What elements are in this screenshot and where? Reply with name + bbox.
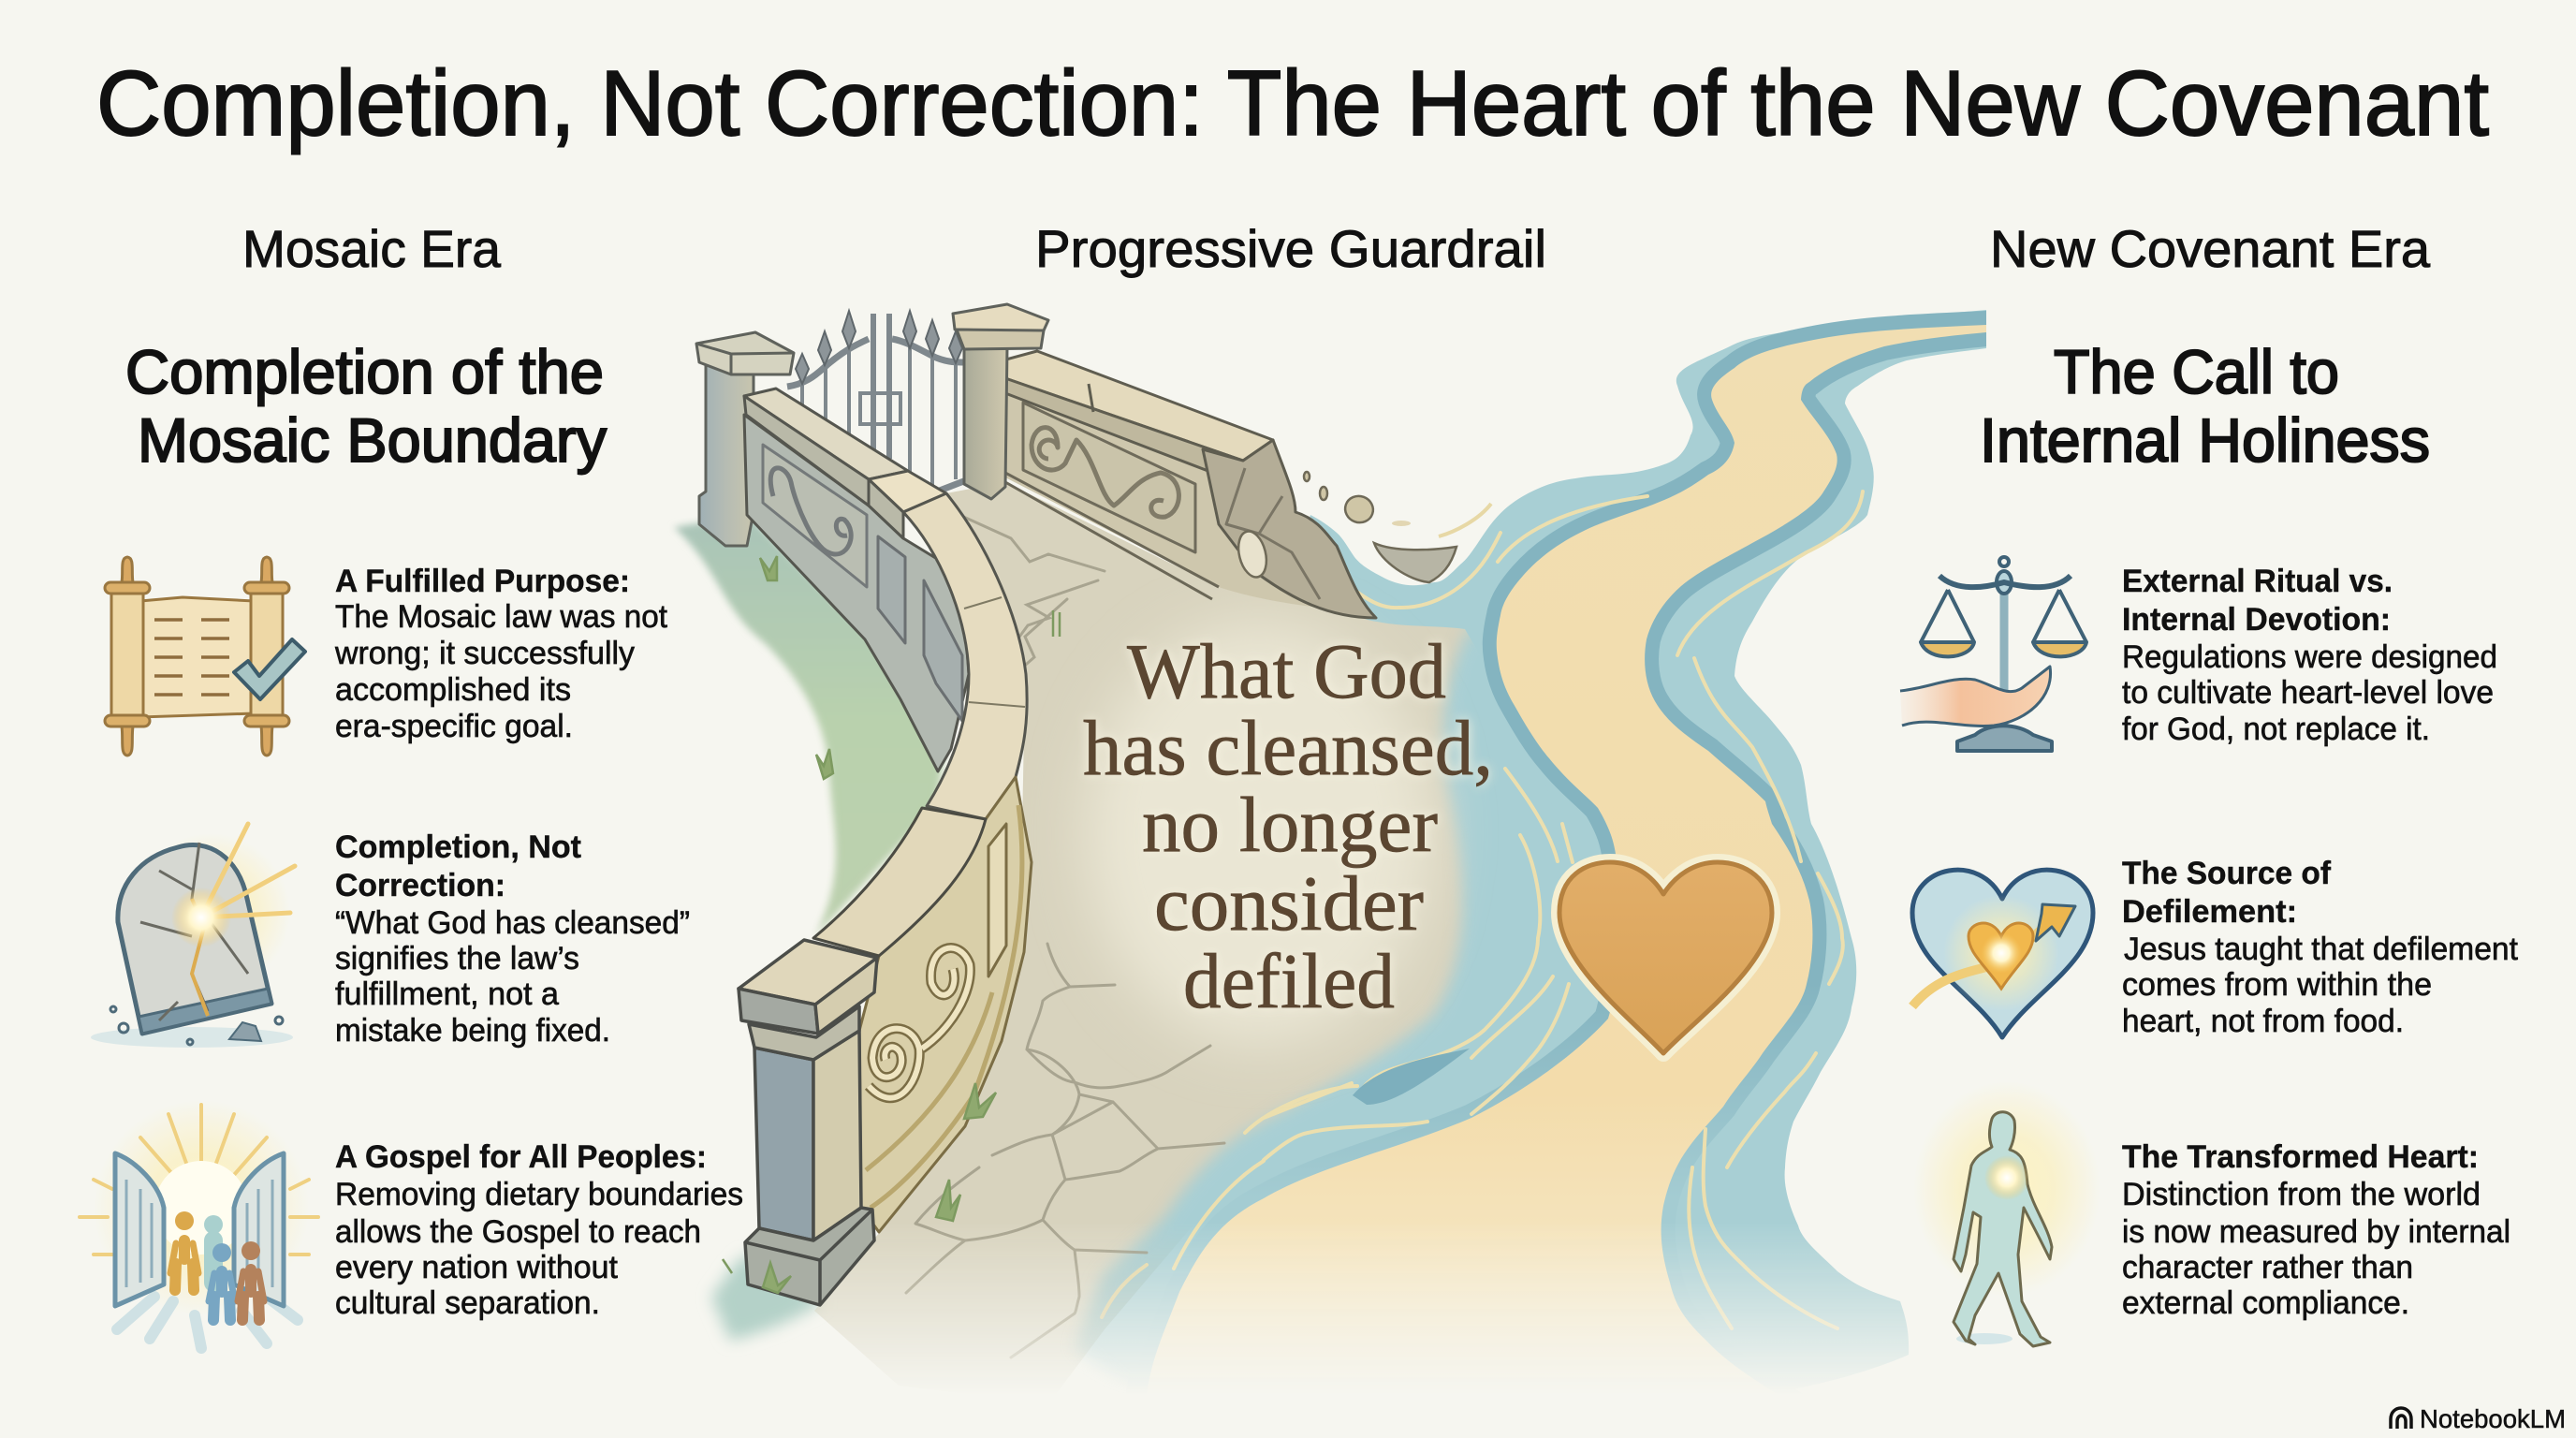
NotebookLM watermark: NotebookLM	[2420, 1404, 2566, 1433]
text: A Fulfilled Purpose: The Mosaic law was not	[335, 599, 668, 635]
text: Completion, Not Correction: mistake being fixed.	[335, 1013, 610, 1049]
illustration: path, wall and river	[674, 304, 1986, 1404]
central quotation: What God	[1127, 628, 1446, 715]
icon: glowing walking figure	[1913, 1081, 2100, 1346]
text: Completion, Not Correction: “What God has cleansed”	[335, 905, 690, 941]
text: External Ritual vs Internal Devotion: Internal Devotion:	[2122, 602, 2391, 638]
text: A Gospel for All Peoples: every nation without	[335, 1250, 619, 1285]
text: Completion, Not Correction: Correction:	[335, 868, 505, 903]
river left bank wash	[1076, 629, 1571, 1376]
golden heart	[1559, 862, 1772, 1053]
outer scroll carving	[770, 468, 851, 554]
text: The Source of Defilement	[2122, 856, 2519, 1039]
central quotation: has cleansed,	[1083, 705, 1493, 792]
central quotation: defiled	[1183, 938, 1395, 1025]
curved coping segments	[744, 389, 908, 479]
text: The Source of Defilement: comes from within the	[2122, 967, 2432, 1003]
right wall face	[1005, 377, 1364, 611]
gate lock plate	[860, 393, 900, 424]
text: A Gospel for All Peoples	[335, 1139, 743, 1321]
outer side panels	[878, 536, 962, 721]
text: A Fulfilled Purpose: A Fulfilled Purpose:	[335, 564, 630, 599]
text: External Ritual vs Internal Devotion: for God, not replace it.	[2122, 712, 2430, 747]
text: A Gospel for All Peoples: A Gospel for All Peoples:	[335, 1139, 707, 1175]
halo behind central quotation	[1086, 623, 1432, 1044]
icon: open gates and people	[80, 1100, 318, 1348]
left pillar shaft	[699, 365, 754, 546]
right wall coping	[1003, 351, 1273, 461]
river yellow streaks	[1102, 492, 1863, 1328]
title: Completion, Not Correction: The Heart of the New Covenant	[96, 51, 2489, 154]
river dark fold	[1353, 1049, 1470, 1105]
text: The Transformed Heart: character rather than	[2122, 1250, 2413, 1285]
column label: New Covenant Era: New Covenant Era	[1990, 219, 2431, 278]
text: External Ritual vs Internal Devotion	[2122, 564, 2497, 747]
text: External Ritual vs Internal Devotion: to cultivate heart-level love	[2122, 675, 2494, 711]
text: External Ritual vs Internal Devotion: Regulations were designed	[2122, 639, 2497, 675]
text: A Fulfilled Purpose: era-specific goal.	[335, 709, 573, 744]
text: The Source of Defilement: Defilement:	[2122, 894, 2297, 930]
river sand channel with dark banks	[1147, 325, 1986, 1395]
central quotation: consider	[1154, 860, 1424, 947]
central quotation: no longer	[1142, 782, 1438, 869]
central quotation	[1083, 628, 1493, 1025]
outer wall face	[744, 415, 969, 771]
grass tufts	[723, 556, 1060, 1293]
heading: The Call to Internal Holiness: Internal Holiness	[1980, 405, 2430, 475]
wall inner face with scrolls	[813, 777, 1032, 1232]
text: A Gospel for All Peoples: Removing dietary boundaries	[335, 1177, 743, 1212]
text: A Gospel for All Peoples: allows the Gospel to reach	[335, 1214, 701, 1250]
text: Completion, Not Correction: signifies the law’s	[335, 941, 579, 976]
heading: Completion of the Mosaic Boundary: Completion of the	[125, 337, 604, 406]
text: The Transformed Heart: Distinction from the world	[2122, 1177, 2481, 1212]
text: The Transformed Heart	[2122, 1139, 2510, 1321]
icon: heart with rising arrow	[1912, 870, 2093, 1037]
big spiral carving	[869, 948, 970, 1098]
text: Completion, Not Correction: Completion, Not	[335, 829, 581, 865]
pillar shaft	[754, 1048, 813, 1240]
grass beside the wall	[674, 515, 945, 936]
icon: scales and open hand	[1900, 557, 2086, 751]
heading: The Call to Internal Holiness	[1980, 337, 2430, 475]
icon: cracked stone tablet	[91, 824, 295, 1048]
text: Completion, Not Correction: fulfillment, not a	[335, 976, 559, 1012]
pillar base	[745, 1208, 874, 1305]
text: The Source of Defilement: Jesus taught that defilement	[2124, 932, 2519, 967]
heading: Completion of the Mosaic Boundary: Mosaic Boundary	[138, 405, 607, 475]
river outer banks	[1310, 310, 1986, 1378]
column label: Mosaic Era: Mosaic Era	[242, 219, 502, 278]
text: The Transformed Heart: is now measured by internal	[2122, 1214, 2510, 1250]
river of living water	[1075, 310, 1986, 1404]
gate pillars	[696, 304, 1048, 546]
text: A Fulfilled Purpose: wrong; it successfully	[334, 636, 635, 671]
right pillar cap	[953, 304, 1048, 330]
iron gate	[787, 311, 973, 492]
left pillar cap	[696, 332, 794, 374]
stone path	[814, 485, 1472, 1367]
lower coping stone	[813, 808, 986, 956]
scroll carving	[1032, 428, 1178, 517]
text: External Ritual vs Internal Devotion: External Ritual vs.	[2122, 564, 2393, 599]
grass under end pillar	[711, 1255, 824, 1341]
gate spear tips	[796, 311, 962, 384]
heading: The Call to Internal Holiness: The Call to	[2054, 337, 2339, 406]
broken wall end	[1203, 440, 1376, 618]
heading: Completion of the Mosaic Boundary	[125, 337, 607, 475]
text: Completion, Not Correction	[335, 829, 690, 1049]
end pillar	[739, 940, 877, 1305]
text: The Transformed Heart: external compliance.	[2122, 1285, 2409, 1321]
text: A Fulfilled Purpose: accomplished its	[335, 672, 571, 708]
right pillar shaft	[964, 346, 1007, 499]
falling stones	[1234, 472, 1491, 582]
text: The Source of Defilement: heart, not from food.	[2122, 1004, 2404, 1039]
text: A Gospel for All Peoples: cultural separation.	[335, 1285, 600, 1321]
path cobbles and cracks	[906, 515, 1224, 1357]
column label: Progressive Guardrail: Progressive Guardrail	[1035, 219, 1546, 278]
carved panel	[1023, 403, 1195, 552]
text: A Fulfilled Purpose	[334, 564, 668, 744]
icon: scroll with check	[105, 557, 305, 756]
text: The Source of Defilement: The Source of	[2122, 856, 2332, 891]
icon: NotebookLM logo	[2391, 1408, 2411, 1429]
pillar cap	[739, 940, 877, 1005]
outer panel carving	[763, 445, 867, 587]
curved wall	[744, 389, 1027, 819]
text: The Transformed Heart: The Transformed Heart:	[2122, 1139, 2479, 1175]
right wall segment	[1003, 351, 1376, 618]
